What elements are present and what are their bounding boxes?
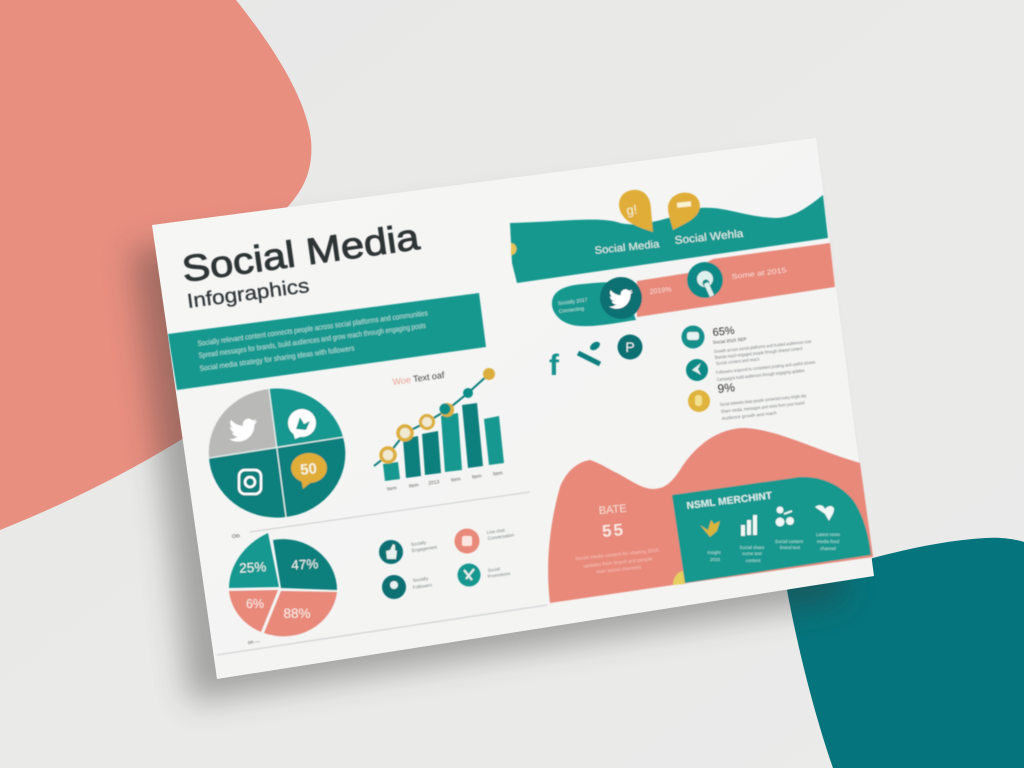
bars <box>383 403 504 481</box>
stat text 1: Growth across social platforms and trusted audiences now <box>714 339 812 354</box>
pie callout top: Oth <box>232 533 240 540</box>
pie callout bottom: on — <box>248 639 260 646</box>
poster sheet <box>152 138 874 679</box>
stat icon: gold <box>688 390 710 412</box>
legend item: salmon badge: Conversation <box>487 532 515 541</box>
slice labels <box>239 556 319 621</box>
axis labels: Item <box>493 470 503 478</box>
slice: 25% <box>229 533 279 588</box>
band text <box>197 308 428 373</box>
card captions: brand text <box>780 545 801 550</box>
ribbon label 2: Social Wehla <box>674 228 745 247</box>
icon legend <box>379 527 515 599</box>
stat text 1: Social content and reach <box>716 356 760 366</box>
stat text 2: Audience growth and reach <box>722 410 777 421</box>
stat text 2 <box>717 380 807 421</box>
icon: pinterest circle: P <box>625 339 635 355</box>
pie chart: percentages <box>229 533 337 646</box>
pill with caption: Connecting <box>559 306 585 315</box>
icon: twitter bird <box>229 419 257 442</box>
legend item: location: Followers <box>412 582 433 590</box>
date number: 55 <box>601 520 626 541</box>
card icon: bars <box>741 515 757 536</box>
salmon shape <box>548 428 873 603</box>
pie quadrant: instagram <box>209 448 286 518</box>
ribbon label 1: Social Media <box>594 238 660 257</box>
social icon row <box>549 334 642 382</box>
pie dividers <box>209 389 344 517</box>
slice: 88% <box>264 591 337 636</box>
card captions: some text <box>742 551 762 556</box>
slice labels: 47% <box>291 556 319 573</box>
card captions: channel <box>820 546 836 551</box>
stat text 2: Share media, messages and news from your brand <box>721 400 805 414</box>
axis labels: Item <box>451 476 461 484</box>
axis labels: Item <box>472 473 482 481</box>
title <box>179 216 422 313</box>
pill with caption <box>552 282 636 326</box>
icon: instagram <box>239 470 261 494</box>
paper shadow <box>132 170 845 702</box>
stat list <box>682 325 816 421</box>
slice labels: 6% <box>246 597 264 611</box>
stat text 1: Social 2015 SEP <box>713 336 747 345</box>
band shape <box>637 243 835 317</box>
legend item: location <box>382 575 433 599</box>
date caption: updates from brand and people <box>583 556 653 570</box>
background blob: teal <box>787 538 1024 768</box>
card captions: Social content <box>775 539 804 544</box>
card captions: media feed <box>817 539 840 544</box>
ribbon shape <box>510 195 828 283</box>
speech bubble 1 <box>619 190 653 232</box>
chart title: Woe Text oaf <box>392 370 445 387</box>
card captions: Social share <box>740 545 765 550</box>
section dividers <box>217 492 547 655</box>
axis labels: Item <box>387 485 397 493</box>
pie quadrant: messenger <box>269 389 343 448</box>
pie quadrant: coin <box>277 437 345 517</box>
pill with caption: Socially 2017 <box>558 297 588 307</box>
legend item: salmon badge <box>454 527 515 554</box>
trend markers <box>381 368 495 462</box>
gold marker behind card <box>673 571 685 585</box>
stat icon: chat <box>682 326 704 348</box>
legend item: thumbs up <box>379 540 438 564</box>
icon: share <box>578 341 601 364</box>
salmon stat band <box>552 243 835 326</box>
band text: Spread messages for brands, build audiences and grow reach through engaging posts <box>198 321 426 360</box>
card captions: 2015 <box>710 557 721 562</box>
legend item: location: Socially <box>412 576 429 583</box>
stat text 2: 9% <box>717 380 736 396</box>
bar chart <box>374 368 504 493</box>
card heading: NSML MERCHINT <box>686 491 773 512</box>
intro band <box>168 293 486 390</box>
card captions: content <box>746 558 761 563</box>
band label left: 2019% <box>649 286 672 296</box>
slice labels: 25% <box>239 559 267 576</box>
icon: teal key circle <box>687 262 723 298</box>
background blob: salmon <box>0 0 311 530</box>
legend item: thumbs up: Socially <box>410 540 427 547</box>
icon: twitter circle <box>600 277 642 319</box>
band text: Social media strategy for sharing ideas with followers <box>199 343 355 373</box>
trend line <box>374 374 489 466</box>
legend item: tools: Promotions <box>487 571 511 579</box>
card captions <box>707 532 841 563</box>
card captions: Insight <box>707 550 721 555</box>
band text: Socially relevant content connects people across social platforms and communities <box>197 308 428 348</box>
icon: facebook f: f <box>549 349 560 382</box>
icon: messenger bubble <box>288 409 316 439</box>
stat text 1: 65% <box>712 325 735 339</box>
legend item: thumbs up: Engagement <box>411 544 438 553</box>
salmon lower panel <box>548 428 873 603</box>
legend item: tools: Social <box>487 566 500 573</box>
axis labels: Item <box>409 482 419 490</box>
poster content <box>168 190 873 655</box>
title line 1: Social Media <box>179 216 422 290</box>
pie quadrant: twitter <box>209 389 277 458</box>
slice: 6% <box>229 590 278 632</box>
date caption <box>575 548 659 575</box>
band shape <box>168 293 486 390</box>
speech bubble 1: g! <box>625 202 638 218</box>
legend item: tools <box>458 564 511 586</box>
stat text 1: Campaigns build audiences through engaging updates <box>717 368 805 382</box>
title line 2: Infographics <box>186 275 311 313</box>
stat text 1: Followers respond to consistent posting and useful stories <box>716 360 816 375</box>
band label right: Some at 2015 <box>731 267 787 281</box>
stat text 1 <box>712 325 816 382</box>
legend item: salmon badge: Live chat <box>486 527 506 535</box>
slice labels: 88% <box>283 606 311 621</box>
stat text 1: Brands reach engaged people through shared content <box>715 346 803 360</box>
axis labels <box>387 470 503 493</box>
card captions: Latest news <box>816 532 841 537</box>
header ribbon <box>510 190 828 283</box>
card shape <box>672 477 871 583</box>
merchant card <box>672 477 871 583</box>
date heading: BATE <box>598 503 627 517</box>
gold marker on ribbon edge <box>511 243 516 255</box>
speech bubble 2 <box>668 193 700 230</box>
card icon: heart <box>815 505 834 521</box>
axis labels: 2013 <box>428 479 440 487</box>
stat icon: arrow <box>686 359 708 381</box>
slice: 47% <box>273 539 337 590</box>
icon: gold speech bubble with number: 50 <box>299 460 318 479</box>
stat text 2: Social networks keep people connected every single day <box>720 393 807 407</box>
pie chart: platforms <box>209 389 345 518</box>
card icon: gold bird <box>700 520 720 537</box>
date caption: Social media content for sharing 2015 <box>575 548 659 562</box>
date caption: over social channels <box>596 565 642 575</box>
card icon: people <box>776 506 794 526</box>
